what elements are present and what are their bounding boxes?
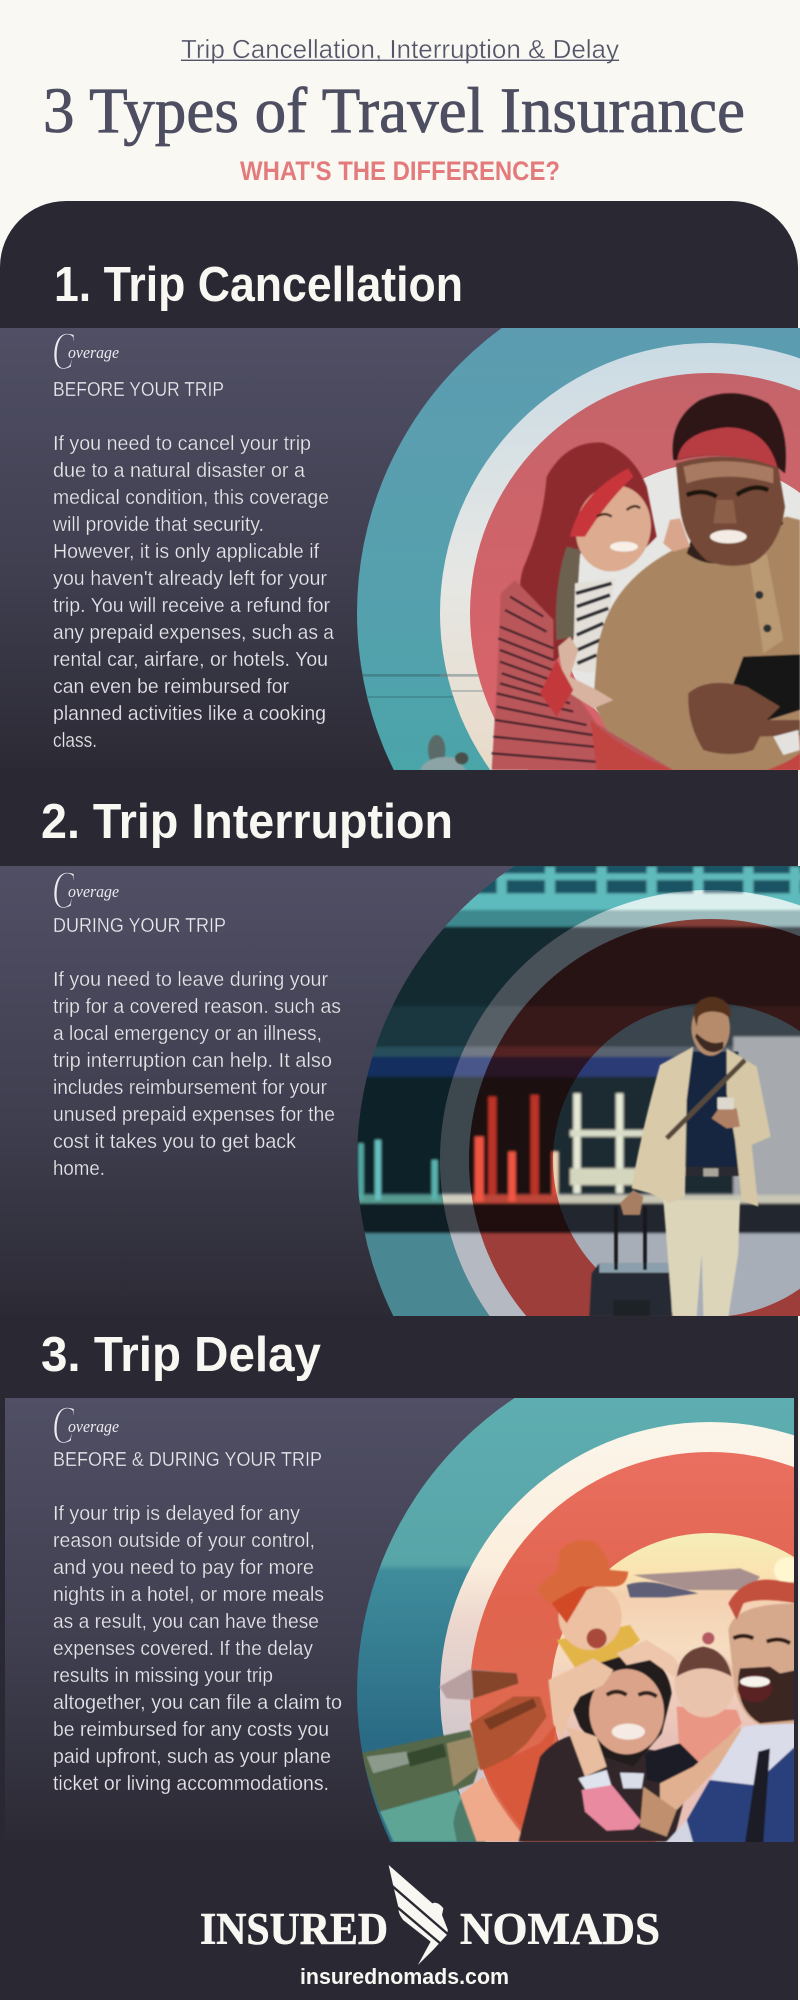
jacket [632, 1047, 693, 1203]
body text: unused prepaid expenses for the [53, 1103, 335, 1126]
body text: rental car, airfare, or hotels. You [53, 648, 328, 671]
body text: cost it takes you to get back [53, 1130, 297, 1153]
body text: includes reimbursement for your [53, 1076, 327, 1099]
body text: ticket or living accommodations. [53, 1772, 329, 1795]
man's clothes [710, 1720, 795, 1787]
body text [52, 432, 335, 752]
child's yellow shirt [557, 1625, 640, 1670]
man's head [676, 457, 785, 566]
woman's sweater [492, 580, 673, 770]
body text: will provide that security. [52, 513, 264, 536]
coverage script label: overage [68, 1417, 119, 1436]
body text: be reimbursed for any costs you [53, 1718, 329, 1741]
panel background [0, 866, 800, 1316]
body text: medical condition, this coverage [53, 486, 329, 509]
coverage timing: BEFORE & DURING YOUR TRIP [53, 1449, 322, 1471]
man's hand [688, 683, 800, 754]
coverage script label: C [52, 1395, 75, 1455]
shirt [687, 1052, 738, 1172]
body text [53, 1502, 342, 1795]
body text: However, it is only applicable if [53, 540, 319, 563]
body text: due to a natural disaster or a [53, 459, 306, 482]
heading: trip delay: 3. Trip Delay [41, 1328, 321, 1382]
body text: as a result, you can have these [53, 1610, 319, 1633]
body text: any prepaid expenses, such as a [53, 621, 335, 644]
hand with phone [712, 1107, 740, 1128]
panel: trip delay [5, 1398, 794, 1842]
body text: a local emergency or an illness, [53, 1022, 322, 1045]
website url: insurednomads.com [300, 1964, 509, 1989]
coverage script label: C [52, 321, 75, 381]
heading: trip cancellation: 1. Trip Cancellation [54, 258, 463, 312]
suitcase [589, 1263, 672, 1317]
body text: If your trip is delayed for any [53, 1502, 301, 1525]
phone [733, 654, 800, 722]
photo: couple looking at a phone inside target rings [357, 328, 800, 770]
coverage timing: BEFORE YOUR TRIP [53, 379, 224, 401]
woman's hair [520, 442, 657, 663]
red band across the man's torso [591, 720, 673, 770]
coverage script label [52, 1395, 119, 1455]
panel: trip interruption [0, 866, 800, 1316]
orange sleeve band [483, 1723, 557, 1830]
body text: class. [53, 729, 97, 752]
photo: businessman with suitcase inside target rings [357, 866, 800, 1316]
coverage script label: overage [68, 343, 119, 362]
white ring [440, 890, 800, 1316]
head [691, 1001, 730, 1056]
body text: expenses covered. If the delay [53, 1637, 314, 1660]
photo: family selfie at sunset inside target rings [357, 1398, 794, 1842]
body text: and you need to pay for more [53, 1556, 314, 1579]
body text: you haven't already left for your [53, 567, 327, 590]
red ring [469, 919, 800, 1316]
woman's hair and face [573, 1647, 672, 1767]
body text: trip. You will receive a refund for [53, 594, 330, 617]
tagline: WHAT'S THE DIFFERENCE? [240, 156, 560, 186]
body text: home. [53, 1157, 105, 1180]
body text: paid upfront, such as your plane [53, 1745, 331, 1768]
hand on suitcase [620, 1190, 643, 1215]
baby [677, 1707, 742, 1767]
woman's body [518, 1735, 687, 1842]
body text: reason outside of your control, [53, 1529, 315, 1552]
woman's hands [663, 518, 690, 552]
body text: planned activities like a cooking [53, 702, 326, 725]
child's legs over shoulders [567, 1727, 607, 1777]
panel background [5, 1398, 794, 1842]
body text: If you need to leave during your [53, 968, 328, 991]
body text: trip interruption can help. It also [53, 1049, 332, 1072]
body text: trip for a covered reason. such as [53, 995, 341, 1018]
man's face [728, 1603, 797, 1725]
shoreline and hillside [360, 1730, 480, 1812]
man's body [593, 517, 800, 770]
coverage script label [52, 321, 119, 381]
body text: can even be reimbursed for [53, 675, 289, 698]
logo wordmark right: NOMADS [460, 1904, 660, 1954]
blurred station scene [340, 860, 800, 1327]
body text: If you need to cancel your trip [53, 432, 311, 455]
shoulder strap [667, 1060, 745, 1138]
coverage script label: C [52, 860, 75, 920]
traveller [589, 997, 771, 1317]
panel background [0, 328, 800, 770]
subtitle: Trip Cancellation, Interruption & Delay [181, 34, 619, 64]
title: 3 Types of Travel Insurance [43, 75, 745, 147]
coverage timing: DURING YOUR TRIP [53, 915, 226, 937]
heading: trip interruption: 2. Trip Interruption [41, 795, 453, 849]
adult arm holding baby [660, 1727, 743, 1810]
woman's face [575, 486, 652, 572]
distant islands [633, 1568, 760, 1590]
child's arms [548, 1658, 613, 1738]
body text: results in missing your trip [53, 1664, 273, 1687]
body text: nights in a hotel, or more meals [53, 1583, 324, 1606]
child's head and hat [558, 1583, 622, 1650]
coverage script label [52, 860, 119, 920]
logo: insured nomads [200, 1865, 660, 1965]
coverage script label: overage [68, 882, 119, 901]
body text [53, 968, 341, 1180]
trousers [663, 1200, 740, 1317]
teal ring tint [357, 866, 800, 1316]
logo wordmark left: INSURED [200, 1904, 388, 1954]
panel: trip cancellation [0, 328, 800, 770]
body text: altogether, you can file a claim to [53, 1691, 342, 1714]
icon: wing [389, 1865, 449, 1965]
